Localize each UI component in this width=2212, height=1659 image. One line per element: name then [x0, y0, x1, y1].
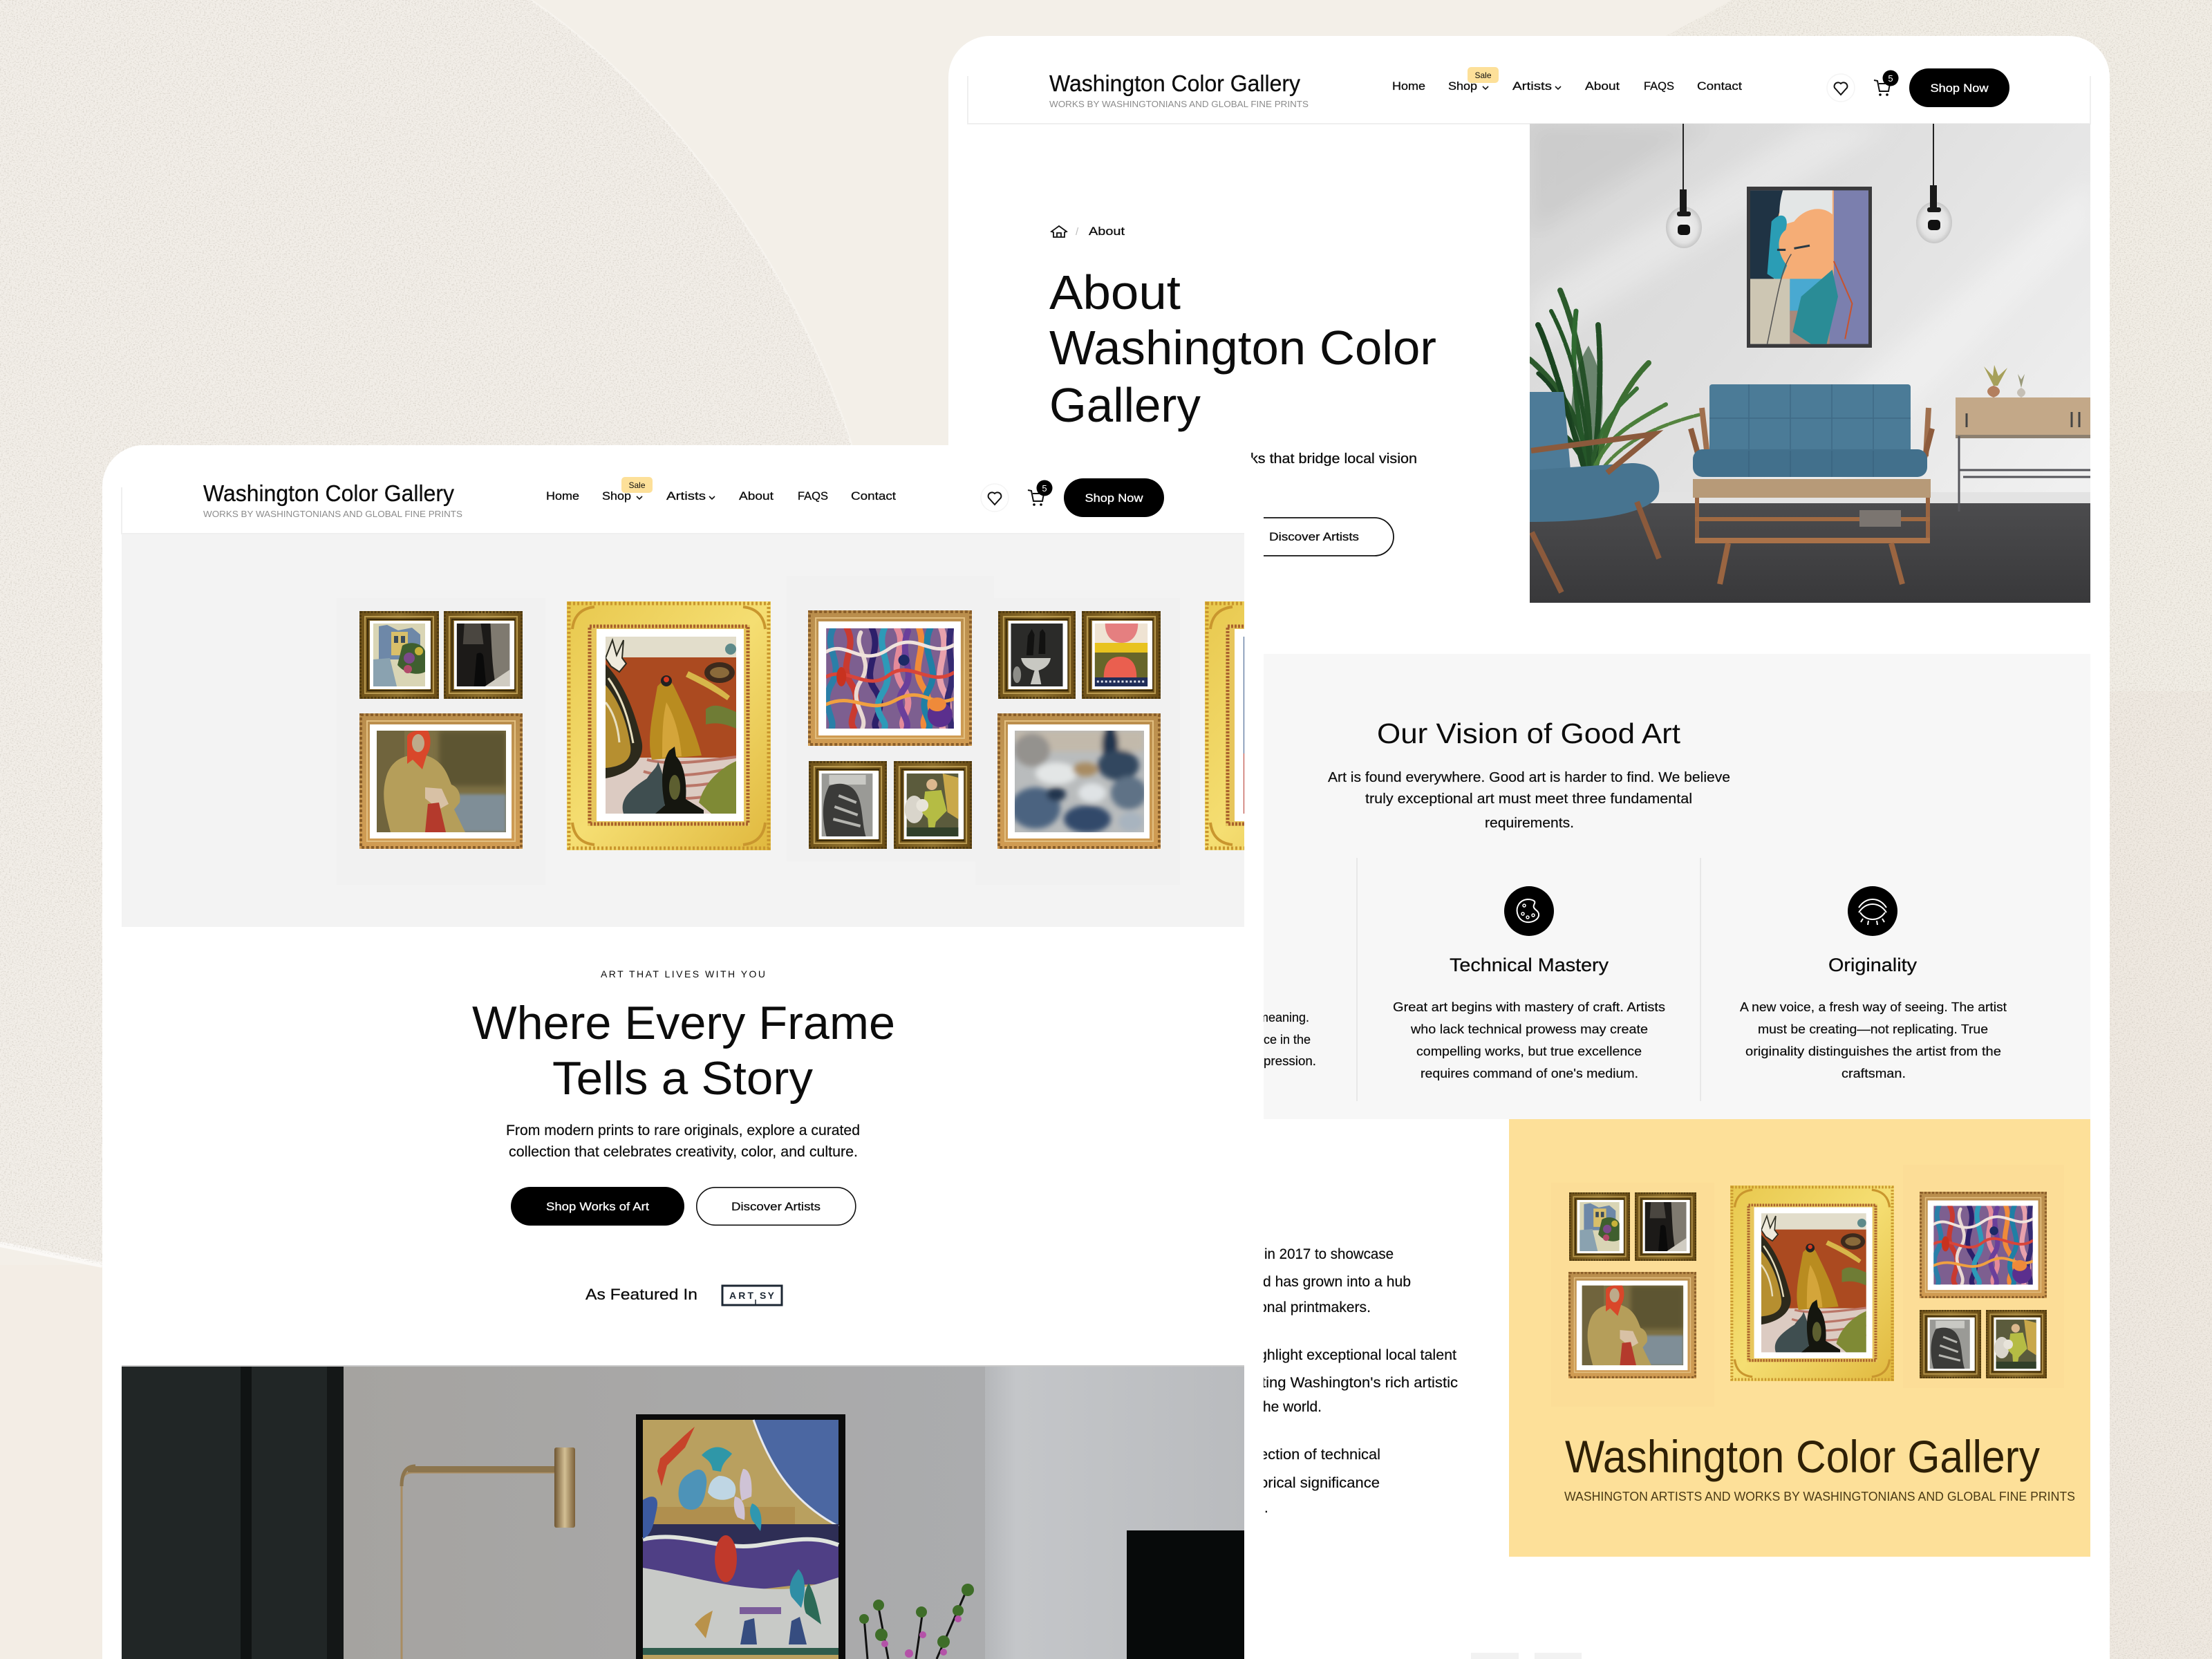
back shop now button: Shop Now [1930, 82, 1989, 95]
icon: front cart [1028, 480, 1052, 506]
icon: palette [1504, 886, 1554, 936]
front sale badge: Sale [628, 480, 646, 490]
panel: yellow gallery card [1509, 1119, 2090, 1557]
yellow panel subtitle: WASHINGTON ARTISTS AND WORKS BY WASHINGTONIANS AND GLOBAL FINE PRINTS [1564, 1490, 2075, 1503]
vision heading: Our Vision of Good Art [1377, 718, 1681, 749]
front shop now button [1064, 478, 1164, 517]
plant [1530, 290, 1699, 477]
back tagline: WORKS BY WASHINGTONIANS AND GLOBAL FINE PRINTS [1049, 100, 1309, 109]
originality body [1740, 1000, 2007, 1080]
discover artists outline button [1217, 518, 1394, 556]
technical mastery body: Great art begins with mastery of craft. Artists [1393, 1000, 1665, 1014]
front logo: Washington Color Gallery [203, 480, 454, 506]
artsy logo: ART [729, 1290, 753, 1301]
partial first column text: ce in the [1264, 1032, 1311, 1047]
technical mastery body: compelling works, but true excellence [1416, 1044, 1642, 1058]
front nav links: Home [546, 489, 579, 503]
eyebrow: ART THAT LIVES WITH YOU [601, 968, 765, 980]
breadcrumb: / [1076, 226, 1079, 238]
back nav links: FAQS [1644, 79, 1674, 93]
icon: back heart [1827, 74, 1855, 102]
shop works button: Shop Works of Art [546, 1200, 649, 1213]
story text block: ection of technical [1259, 1447, 1380, 1463]
back sale badge [1468, 67, 1499, 83]
column: originality [1740, 886, 2007, 1080]
panel: front page home card [102, 445, 1264, 1659]
vision intro: requirements. [1485, 816, 1574, 831]
story text block: he world. [1263, 1399, 1322, 1415]
story text block: in 2017 to showcase [1264, 1246, 1394, 1262]
back logo: Washington Color Gallery [1049, 71, 1300, 96]
hero description: From modern prints to rare originals, explore a curated [506, 1123, 860, 1138]
originality body: craftsman. [1841, 1066, 1906, 1080]
discover artists outline button: Discover Artists [1269, 530, 1359, 543]
breadcrumb [1051, 225, 1125, 238]
icon: front heart [981, 484, 1009, 512]
shop works button [511, 1187, 684, 1226]
icon: back cart: 5 [1888, 73, 1893, 84]
originality body: originality distinguishes the artist from the [1745, 1044, 2001, 1058]
artsy logo: SY [760, 1290, 775, 1301]
technical mastery body: who lack technical prowess may create [1410, 1022, 1648, 1036]
as featured in: As Featured In [585, 1286, 697, 1303]
about heading: Gallery [1049, 378, 1201, 432]
main heading [472, 997, 895, 1105]
artsy logo [722, 1286, 782, 1305]
partial first column text [1258, 1010, 1316, 1068]
partial first column text: pression. [1264, 1053, 1316, 1068]
main heading: Tells a Story [552, 1052, 813, 1105]
bottom interior photo [122, 1365, 1244, 1659]
panel: vision section [968, 654, 2090, 1119]
story text block: orical significance [1259, 1475, 1380, 1491]
about heading [1049, 265, 1436, 432]
hero description: collection that celebrates creativity, color, and culture. [509, 1144, 858, 1160]
back nav links: Home [1392, 79, 1425, 93]
story text block: . [1264, 1500, 1268, 1516]
technical mastery heading: Technical Mastery [1450, 955, 1609, 975]
front nav links: Artists [666, 489, 706, 503]
left armchair [1530, 392, 1659, 592]
front nav links: Shop [602, 489, 631, 503]
originality body: must be creating—not replicating. True [1758, 1022, 1988, 1036]
framed artworks [359, 601, 1244, 850]
back sale badge: Sale [1474, 71, 1492, 80]
hero gallery wall [122, 534, 1244, 927]
front nav links [546, 489, 896, 503]
back nav links: Artists [1512, 79, 1552, 93]
discover artists button [697, 1188, 856, 1225]
back nav links: Shop [1448, 79, 1477, 93]
pendant lamps [1666, 124, 1952, 248]
yellow panel title: Washington Color Gallery [1565, 1431, 2040, 1482]
breadcrumb: About [1089, 225, 1125, 238]
brass lamp [402, 1447, 575, 1659]
footer thumbnails [1471, 1653, 1582, 1659]
vision intro [1328, 770, 1730, 831]
main heading: Where Every Frame [472, 997, 895, 1049]
front nav links: Contact [851, 489, 896, 503]
front tagline: WORKS BY WASHINGTONIANS AND GLOBAL FINE PRINTS [203, 509, 462, 519]
yellow panel framed artworks [1568, 1185, 2047, 1381]
column: technical mastery [1393, 886, 1665, 1080]
room photo [1530, 124, 2090, 603]
panel: back page about card [948, 36, 2110, 1659]
flowering plant [859, 1584, 974, 1659]
front sale badge [621, 477, 653, 493]
front shop now button: Shop Now [1085, 491, 1143, 505]
originality body: A new voice, a fresh way of seeing. The artist [1740, 1000, 2007, 1014]
about heading: About [1049, 265, 1181, 319]
story text block: ghlight exceptional local talent [1259, 1347, 1456, 1363]
icon: eye [1848, 886, 1897, 936]
front nav links: About [739, 489, 774, 503]
back shop now button [1909, 68, 2009, 107]
vision intro: truly exceptional art must meet three fundamental [1365, 791, 1692, 807]
discover artists button: Discover Artists [731, 1200, 821, 1213]
back nav links: About [1585, 79, 1620, 93]
front navigation bar [203, 477, 1164, 519]
framed poster [636, 1414, 845, 1659]
technical mastery body [1393, 1000, 1665, 1080]
side table [1956, 365, 2090, 512]
black furniture [1127, 1530, 1244, 1659]
story text block: onal printmakers. [1259, 1300, 1371, 1315]
blue sofa [1691, 384, 1932, 477]
vision intro: Art is found everywhere. Good art is harder to find. We believe [1328, 770, 1730, 785]
story text block: d has grown into a hub [1263, 1274, 1411, 1290]
originality heading: Originality [1828, 955, 1918, 975]
front nav links: FAQS [798, 489, 828, 503]
story text block: ting Washington's rich artistic [1262, 1375, 1458, 1391]
partial first column text: meaning. [1258, 1010, 1309, 1024]
back navigation bar [1049, 67, 2009, 109]
about heading: Washington Color [1049, 321, 1436, 375]
hero copy [472, 968, 895, 1305]
back nav links: Contact [1697, 79, 1742, 93]
hero description [506, 1123, 860, 1160]
back nav links [1392, 79, 1742, 93]
story text block [1259, 1246, 1458, 1516]
coffee table [1693, 479, 1931, 584]
wall painting [1747, 187, 1872, 348]
about intro text: ks that bridge local vision [1250, 451, 1417, 467]
technical mastery body: requires command of one's medium. [1421, 1066, 1638, 1080]
icon: back cart [1874, 71, 1898, 96]
icon: front cart: 5 [1042, 483, 1047, 494]
